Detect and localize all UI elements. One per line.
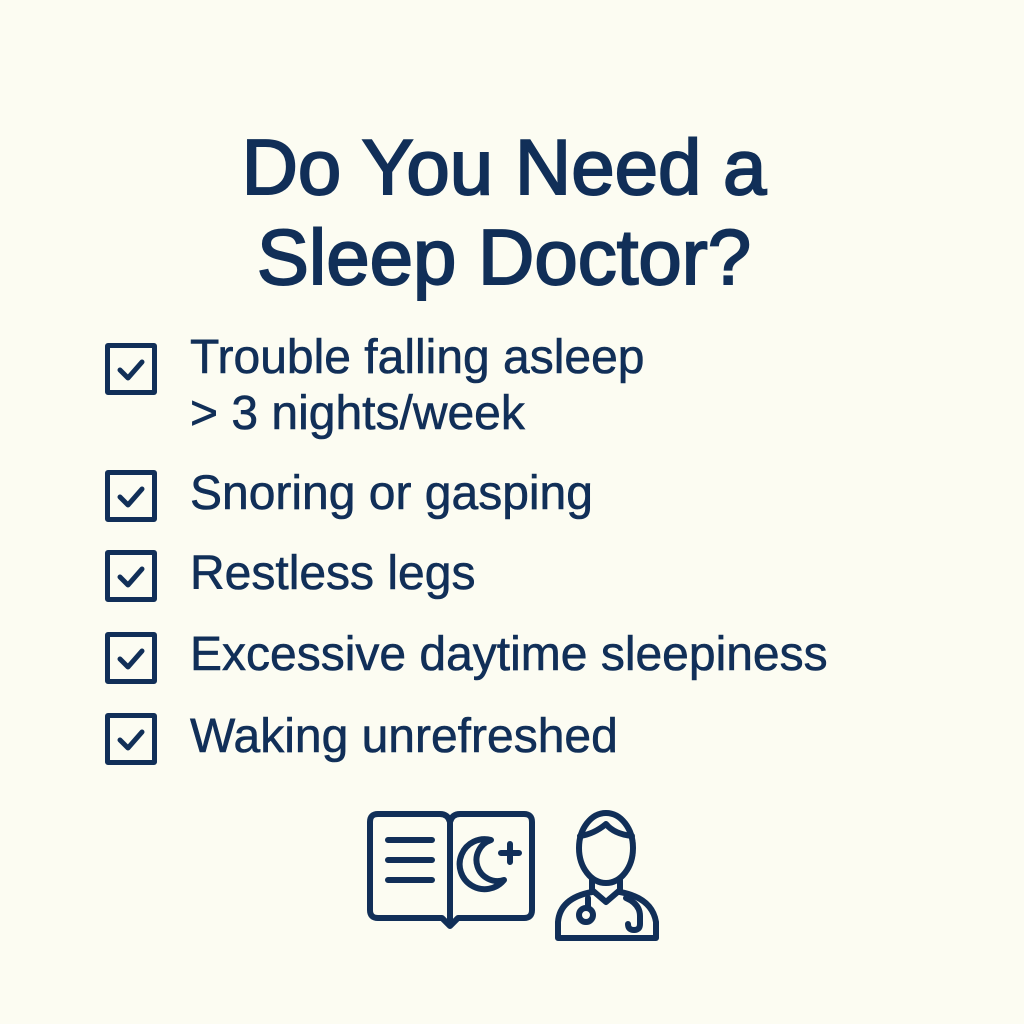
title [242, 123, 768, 301]
item 1 text: Trouble falling asleep [190, 331, 644, 384]
item 3 text: Restless legs [190, 547, 475, 600]
item 1 text [190, 331, 644, 440]
item 2 checkbox [105, 470, 157, 522]
item 4 text: Excessive daytime sleepiness [190, 628, 828, 681]
icon: doctor [558, 813, 656, 938]
item 1 checkbox [105, 343, 157, 395]
item 3 checkbox [105, 550, 157, 602]
item 4 checkbox [105, 632, 157, 684]
icon: sleep diary book [370, 814, 532, 926]
item 1 text: > 3 nights/week [190, 387, 525, 440]
item 5 text: Waking unrefreshed [190, 710, 618, 763]
item 2 text: Snoring or gasping [190, 467, 593, 520]
icons [367, 810, 659, 941]
title: Sleep Doctor? [257, 213, 751, 301]
title: Do You Need a [242, 123, 766, 211]
checklist [105, 331, 828, 765]
item 5 checkbox [105, 713, 157, 765]
